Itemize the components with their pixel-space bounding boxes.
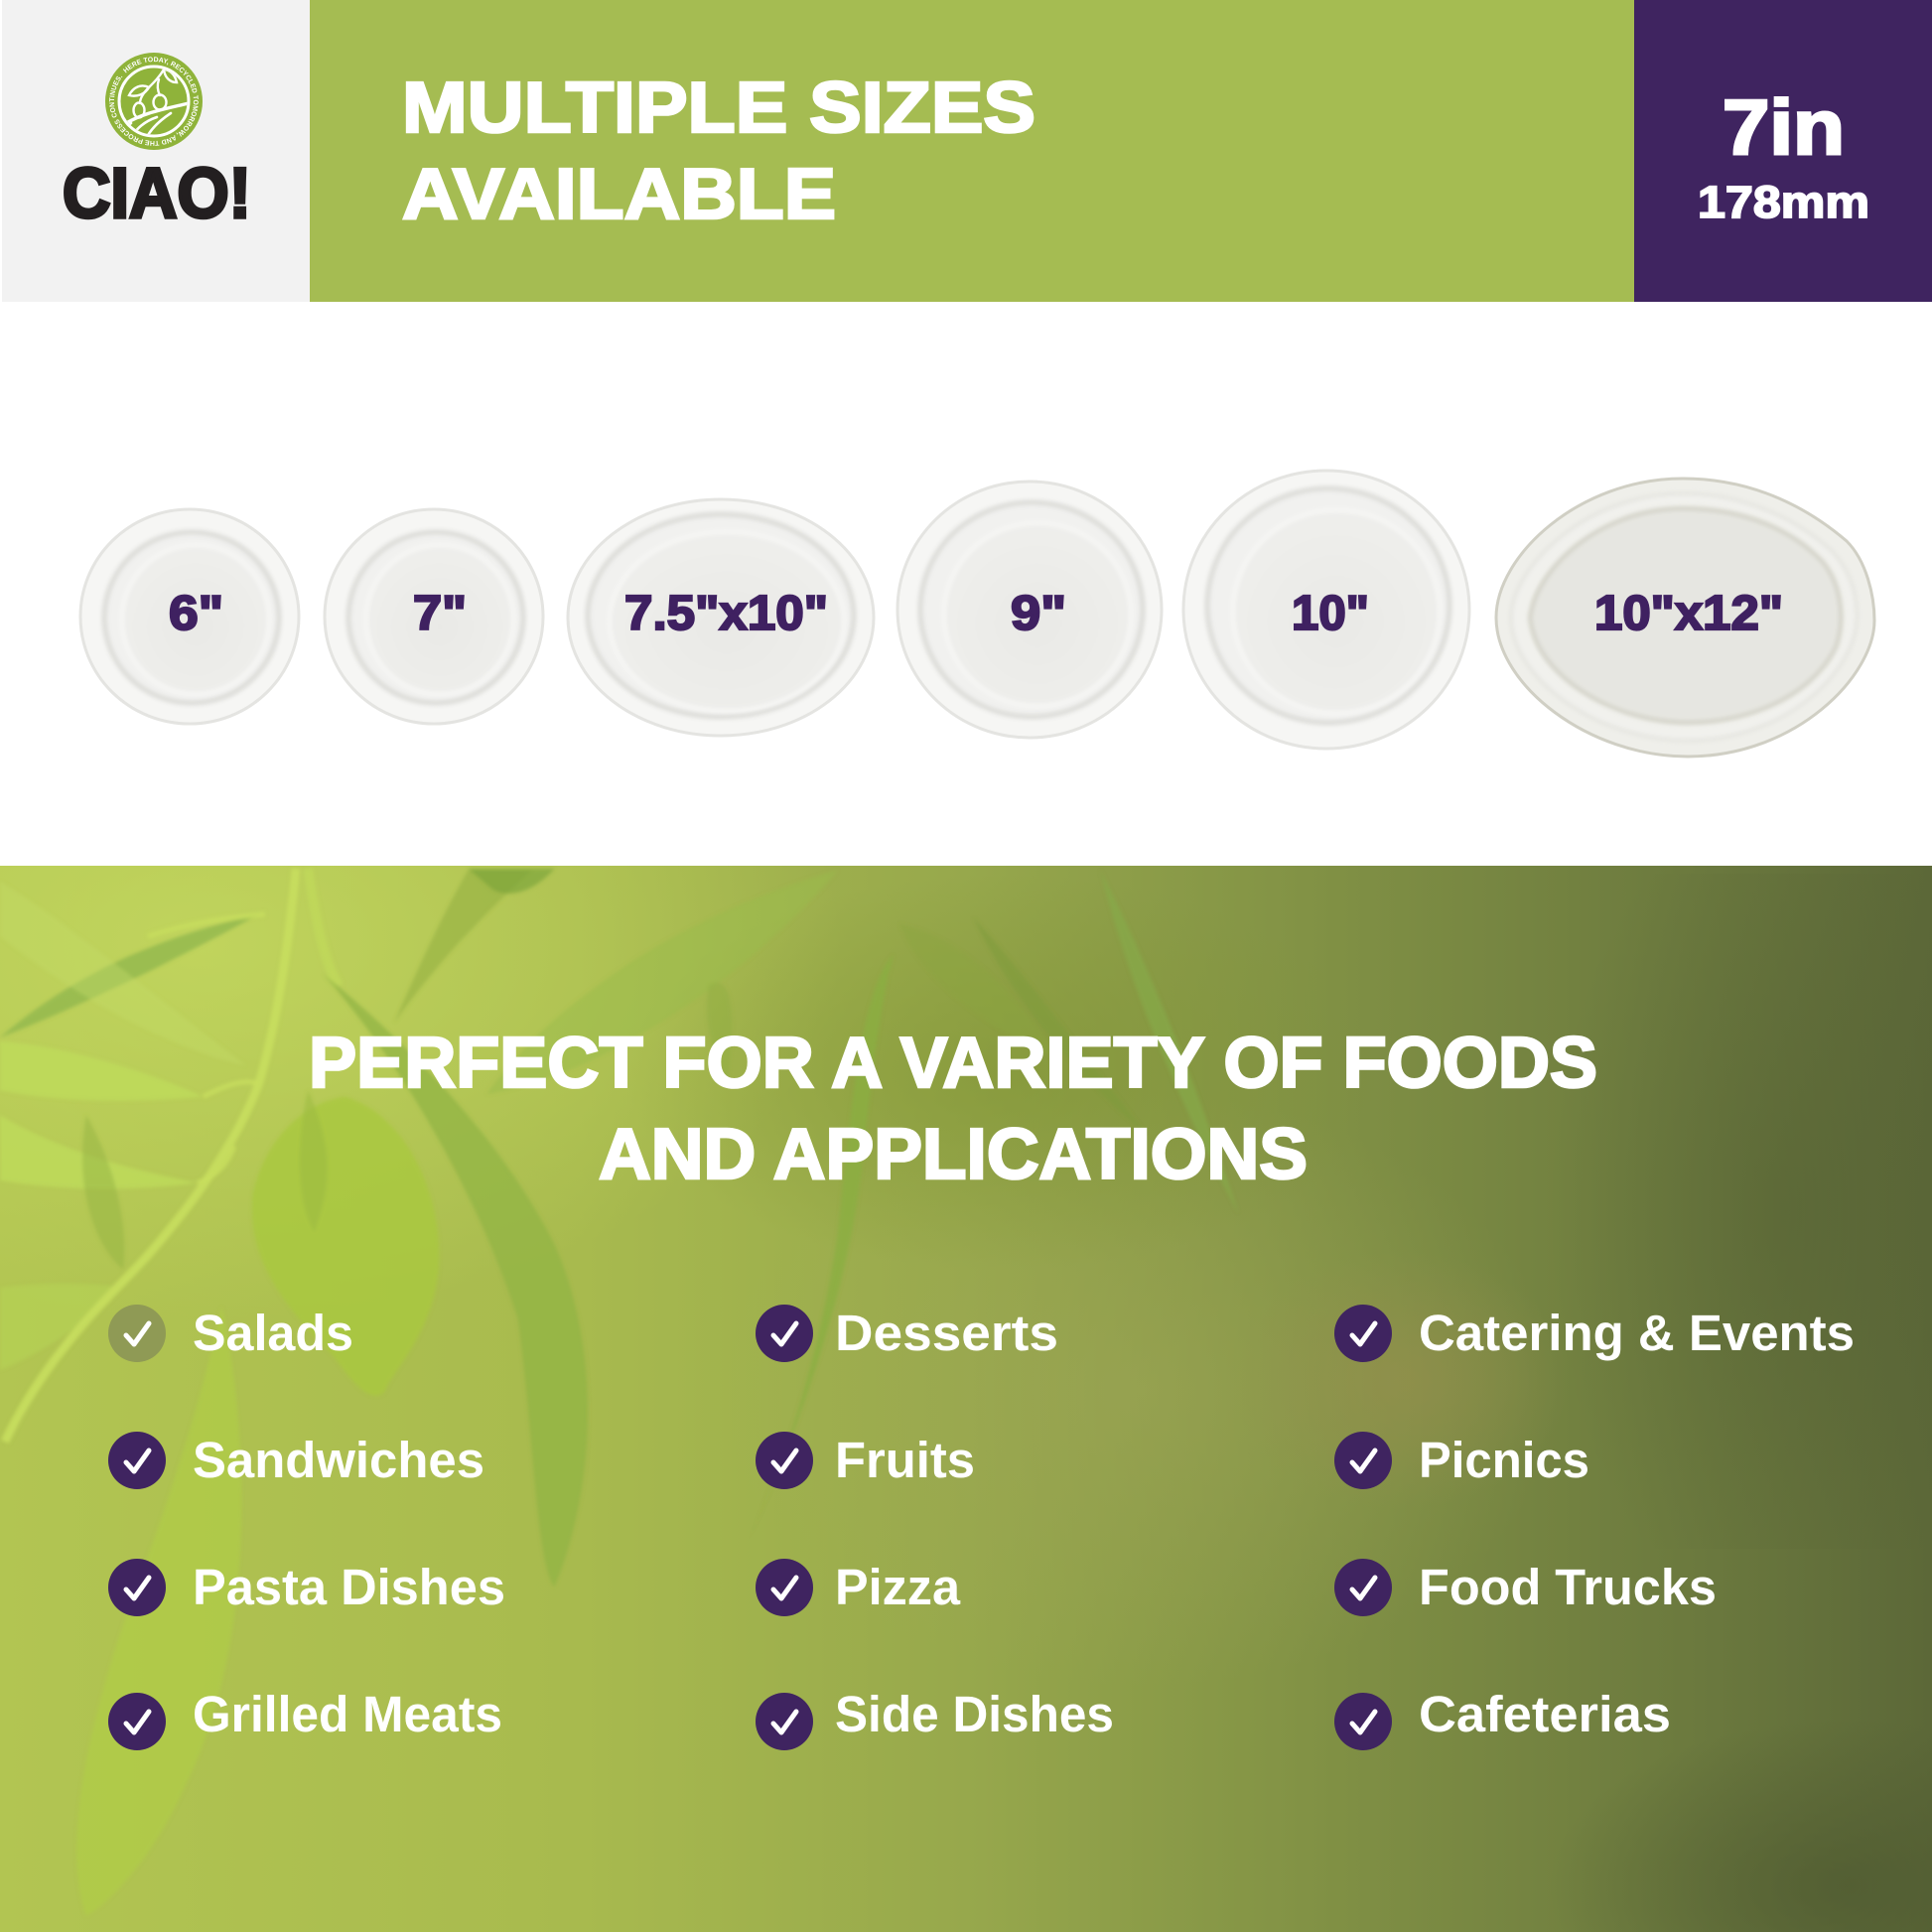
item: desserts	[756, 1305, 1058, 1362]
heading panel	[310, 0, 1634, 302]
panel: header band	[2, 0, 1932, 302]
item: sandwiches: Sandwiches	[193, 1432, 484, 1488]
plate: 7 inch: 7"	[413, 587, 467, 640]
size: 7in: 7in	[1723, 83, 1845, 171]
logo panel	[2, 0, 310, 302]
item: cafeterias	[1334, 1686, 1671, 1750]
plate: 6 inch	[80, 509, 299, 724]
item: salads	[108, 1305, 353, 1362]
plate: 6 inch: 6"	[169, 587, 223, 640]
panel: plate size lineup	[80, 471, 1874, 757]
brand wordmark: CIAO!	[63, 155, 251, 233]
heading: multiple sizes available: AVAILABLE	[402, 155, 836, 234]
plate: 10 by 12 inch	[1496, 479, 1874, 757]
item: desserts: Desserts	[835, 1305, 1058, 1361]
list: occasions column	[1334, 1305, 1855, 1750]
size: 178mm: 178mm	[1698, 177, 1869, 227]
plate: 7.5 by 10 inch	[568, 499, 874, 736]
item: fruits	[756, 1432, 975, 1489]
plate: 7 inch	[325, 509, 543, 724]
plate: 10 by 12 inch: 10"x12"	[1594, 587, 1783, 640]
plate: 10 inch: 10"	[1292, 587, 1369, 640]
item: catering and events: Catering & Events	[1419, 1305, 1855, 1361]
item: grilled meats: Grilled Meats	[193, 1686, 502, 1742]
item: pizza: Pizza	[835, 1559, 961, 1615]
item: pizza	[756, 1559, 961, 1616]
icon: round recycled badge: HERE TODAY, RECYCLED TOMORROW, AND THE PROCESS CONTINUES.	[109, 57, 199, 146]
size callout panel	[1634, 0, 1932, 302]
olive branch photo backdrop	[0, 869, 1238, 1916]
heading: multiple sizes available	[402, 69, 1035, 234]
heading: perfect for a variety of foods	[309, 1024, 1597, 1194]
plate: 7.5 by 10 inch: 7.5"x10"	[624, 587, 828, 640]
heading: perfect for a variety of foods: PERFECT FOR A VARIETY OF FOODS	[309, 1024, 1597, 1103]
plate: 9 inch	[897, 482, 1162, 738]
plate: 9 inch: 9"	[1011, 587, 1066, 640]
item: pasta dishes: Pasta Dishes	[193, 1559, 505, 1615]
list: foods column	[108, 1305, 505, 1750]
item: side dishes: Side Dishes	[835, 1686, 1114, 1742]
item: picnics	[1334, 1432, 1589, 1489]
item: food trucks: Food Trucks	[1419, 1559, 1717, 1615]
item: salads: Salads	[193, 1305, 353, 1361]
list: desserts column	[756, 1305, 1114, 1750]
panel: applications background	[0, 866, 1932, 1932]
plate: 10 inch	[1183, 471, 1469, 749]
item: cafeterias: Cafeterias	[1419, 1686, 1671, 1742]
item: grilled meats	[108, 1686, 502, 1750]
item: side dishes	[756, 1686, 1114, 1750]
heading: multiple sizes available: MULTIPLE SIZES	[402, 69, 1035, 148]
heading: perfect for a variety of foods: AND APPLICATIONS	[599, 1115, 1308, 1194]
item: picnics: Picnics	[1419, 1432, 1589, 1488]
item: fruits: Fruits	[835, 1432, 975, 1488]
